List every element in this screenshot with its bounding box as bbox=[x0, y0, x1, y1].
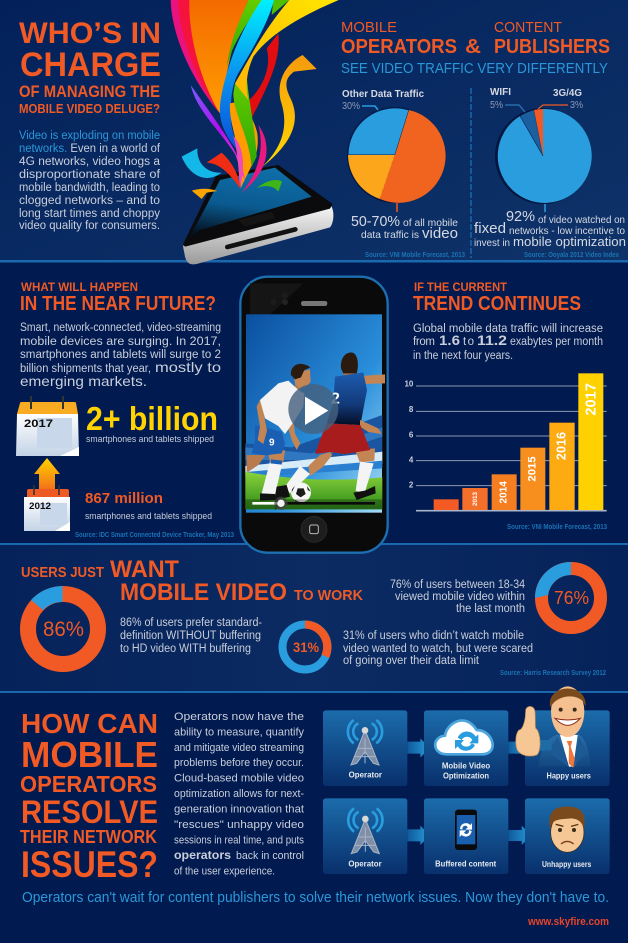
heading: near future bbox=[20, 280, 216, 315]
title: how can mobile operators resolve: ISSUES? bbox=[21, 844, 158, 885]
heading: users just want mobile video to work: MOBILE VIDEO bbox=[120, 579, 287, 606]
title: who's in charge: WHO’S IN bbox=[19, 17, 161, 50]
bar chart: mobile data traffic: 6 bbox=[409, 430, 414, 439]
heading: mobile operators and content publishers: OPERATORS bbox=[341, 36, 457, 58]
stat: 867 million: smartphones and tablets shipped bbox=[85, 511, 212, 522]
pie chart: publishers bbox=[474, 86, 626, 259]
heading: mobile operators and content publishers bbox=[341, 19, 610, 58]
paragraph: operators now: operators bbox=[174, 850, 231, 862]
paragraph: operators now: Cloud-based mobile video bbox=[174, 772, 304, 784]
pie chart: publishers: 92% bbox=[506, 208, 535, 225]
trend paragraph: Global mobile data traffic will increase bbox=[413, 323, 603, 335]
bar chart: mobile data traffic bbox=[404, 373, 607, 511]
icon: calendar 2017 bbox=[16, 396, 79, 456]
donut: 76%: 76% bbox=[554, 587, 589, 608]
box: operator: Operator bbox=[349, 771, 382, 780]
video scene bbox=[245, 353, 385, 511]
trend paragraph: 11.2 bbox=[477, 332, 507, 348]
bar chart: mobile data traffic: 2015 bbox=[527, 456, 539, 482]
heading: trend continues bbox=[413, 280, 581, 315]
near future paragraph bbox=[20, 322, 221, 389]
box: mobile video optimization bbox=[424, 710, 508, 786]
bar chart: mobile data traffic: 2017 bbox=[583, 383, 599, 416]
box: mobile video optimization: Optimization bbox=[443, 771, 489, 780]
paragraph: operators now: optimization allows for next- bbox=[174, 788, 304, 800]
paragraph: operators now: "rescues" unhappy video bbox=[174, 819, 304, 831]
heading: near future: WHAT WILL HAPPEN bbox=[21, 280, 138, 294]
arrow bbox=[407, 826, 430, 845]
box: operator: Operator bbox=[348, 859, 382, 868]
stat: 867 million: 867 million bbox=[85, 490, 163, 507]
title: how can mobile operators resolve: RESOLVE bbox=[21, 794, 158, 830]
donut: 86%: 86% bbox=[43, 618, 84, 641]
paragraph: operators now: of the user experience. bbox=[174, 866, 275, 878]
pie chart: operators: of all mobile bbox=[403, 217, 458, 229]
website url: www.skyfire.com bbox=[527, 916, 609, 928]
paragraph: operators now: and mitigate video streaming bbox=[174, 742, 304, 754]
donut: 31%: 31% bbox=[293, 640, 319, 655]
text: 31% of users: 31% of users who didn’t watch mobile bbox=[343, 630, 524, 642]
text: 86% of users: to HD video WITH buffering bbox=[120, 643, 251, 655]
paragraph: operators now: problems before they occur. bbox=[174, 757, 304, 769]
heading: mobile operators and content publishers: & bbox=[465, 36, 481, 58]
intro paragraph bbox=[19, 130, 161, 232]
text: 86% of users: definition WITHOUT buffering bbox=[120, 630, 261, 642]
box: buffered content bbox=[424, 798, 508, 874]
pie chart: publishers: fixed bbox=[474, 220, 506, 237]
panel: current trend bbox=[404, 280, 607, 531]
heading: users just want mobile video to work: TO WORK bbox=[294, 588, 364, 604]
paragraph: operators now: ability to measure, quantify bbox=[174, 726, 304, 738]
icon: calendar 2012: 2012 bbox=[29, 501, 51, 511]
flow: unhappy path bbox=[323, 798, 610, 874]
text: 76% of users: viewed mobile video within bbox=[395, 591, 525, 603]
panel: who's in charge intro bbox=[19, 17, 161, 232]
trend paragraph bbox=[413, 323, 603, 362]
near future paragraph: Smart, network-connected, video-streaming bbox=[20, 322, 221, 334]
player numbers: 2 bbox=[331, 390, 340, 407]
heading: mobile operators and content publishers: CONTENT bbox=[494, 19, 562, 36]
player: blue shirt bbox=[275, 353, 385, 511]
text: 76% of users: 76% of users between 18-34 bbox=[390, 579, 526, 591]
pie chart: publishers: 5% bbox=[490, 100, 503, 111]
near future paragraph: emerging markets. bbox=[20, 373, 147, 389]
trend paragraph: 1.6 bbox=[439, 332, 460, 348]
pie chart: publishers: 3% bbox=[570, 100, 583, 111]
heading: trend continues: TREND CONTINUES bbox=[413, 293, 581, 315]
player numbers: 9 bbox=[269, 437, 275, 448]
pie chart: publishers: networks - low incentive to bbox=[509, 226, 625, 237]
panel: how can operators resolve bbox=[20, 708, 304, 885]
intro paragraph: networks. Even in a world of bbox=[19, 143, 161, 155]
pie chart: operators: 50-70% bbox=[351, 213, 400, 230]
bar chart: mobile data traffic: 8 bbox=[409, 405, 414, 414]
pie chart: publishers: mobile optimization bbox=[513, 234, 626, 249]
title: how can mobile operators resolve: THEIR NETWORK bbox=[20, 827, 157, 847]
pie chart: publishers: 3G/4G bbox=[553, 87, 582, 99]
player: white shirt bbox=[247, 364, 311, 501]
panel: near future bbox=[16, 280, 234, 539]
intro paragraph: mobile bandwidth, leading to bbox=[19, 182, 160, 194]
title: who's in charge: MOBILE VIDEO DELUGE? bbox=[19, 101, 160, 116]
text: 86% of users: 86% of users prefer standard- bbox=[120, 617, 262, 629]
player numbers bbox=[269, 390, 340, 448]
pie chart: operators: Other Data Traffic bbox=[342, 88, 424, 100]
divider: dashed column rule bbox=[470, 88, 472, 258]
bar chart: mobile data traffic: 2014 bbox=[499, 481, 510, 503]
box: unhappy users bbox=[525, 798, 610, 874]
pie chart: operators: 30% bbox=[342, 101, 360, 112]
near future paragraph: smartphones and tablets will surge to 2 bbox=[20, 349, 221, 361]
flow: happy path bbox=[323, 686, 610, 786]
arrow: growth from 2012 to 2017 bbox=[34, 458, 60, 492]
pie chart: operators: Source: VNI Mobile Forecast, 2013 bbox=[365, 250, 465, 259]
panel: phone with football video bbox=[240, 277, 388, 553]
icon: calendar 2017: 2017 bbox=[24, 418, 53, 430]
paragraph: operators now: generation innovation that bbox=[174, 804, 304, 816]
box: happy users: Happy users bbox=[546, 771, 591, 780]
heading: trend continues: IF THE CURRENT bbox=[414, 280, 508, 294]
trend paragraph: from bbox=[413, 336, 435, 348]
title: who's in charge: CHARGE bbox=[20, 46, 161, 84]
donut: 31% bbox=[282, 620, 331, 670]
source: Source: IDC Smart Connected Device Tracker, May 2013 bbox=[75, 530, 234, 539]
stat: 2+ billion: 2+ billion bbox=[86, 400, 218, 437]
intro paragraph: Video is exploding on mobile bbox=[19, 130, 160, 142]
pie chart: operators: video bbox=[422, 225, 458, 242]
paragraph: operators now: sessions in real time, and puts bbox=[174, 834, 304, 846]
bar chart: mobile data traffic: 2013 bbox=[472, 491, 479, 506]
title: who's in charge: OF MANAGING THE bbox=[19, 82, 160, 101]
play button bbox=[288, 384, 338, 434]
stat: 867 million bbox=[85, 490, 212, 522]
arrow bbox=[407, 738, 430, 758]
text: 31% of users: of going over their data limit bbox=[343, 655, 480, 667]
panel: operators and publishers bbox=[341, 19, 626, 259]
paragraph: operators now bbox=[174, 711, 304, 878]
heading: mobile operators and content publishers: MOBILE bbox=[341, 19, 397, 36]
heading: near future: IN THE NEAR FUTURE? bbox=[20, 293, 216, 315]
intro paragraph: video quality for consumers. bbox=[19, 220, 160, 232]
panel: network flow diagrams bbox=[323, 686, 610, 874]
heading: users just want mobile video to work bbox=[21, 556, 364, 606]
illustration: phone with colour ribbons bbox=[171, 0, 339, 264]
text: 31% of users: video wanted to watch, but were scared bbox=[343, 643, 533, 655]
pie chart: operators bbox=[342, 88, 465, 259]
text: 76% of users: the last month bbox=[456, 603, 525, 615]
pie chart: publishers: WIFI bbox=[490, 86, 511, 98]
donut: 86% bbox=[28, 586, 98, 664]
arrow bbox=[508, 826, 532, 845]
bar chart: mobile data traffic: 4 bbox=[409, 455, 414, 464]
panel: users want mobile video bbox=[21, 556, 606, 677]
icon: calendar 2012 bbox=[24, 485, 70, 531]
pie chart: operators: data traffic is bbox=[361, 229, 419, 241]
phone body bbox=[240, 277, 388, 553]
trend paragraph: in the next four years. bbox=[413, 350, 513, 362]
box: happy users bbox=[508, 686, 610, 786]
title: how can mobile operators resolve: OPERATORS bbox=[20, 771, 157, 797]
pie chart: publishers: invest in bbox=[474, 238, 510, 249]
football bbox=[291, 482, 311, 502]
near future paragraph: mobile devices are surging. In 2017, bbox=[20, 336, 221, 348]
heading: users just want mobile video to work: USERS JUST bbox=[21, 564, 104, 581]
box: operator bbox=[323, 798, 407, 874]
intro paragraph: long start times and choppy bbox=[19, 208, 160, 220]
intro paragraph: disproportionate share of bbox=[19, 169, 161, 181]
text: 31% of users bbox=[343, 630, 533, 667]
title: how can mobile operators resolve: HOW CAN bbox=[21, 708, 158, 739]
stat: 2+ billion: smartphones and tablets shipped bbox=[86, 434, 214, 445]
bar chart: mobile data traffic: 10 bbox=[404, 380, 414, 389]
text: 76% of users bbox=[390, 579, 526, 615]
bar chart: mobile data traffic: 2 bbox=[409, 481, 414, 490]
text: 86% of users bbox=[120, 617, 262, 655]
box: unhappy users: Unhappy users bbox=[542, 860, 592, 869]
paragraph: operators now: back in control bbox=[236, 850, 304, 862]
trend paragraph: to bbox=[463, 336, 474, 348]
intro paragraph: clogged networks – and to bbox=[19, 195, 160, 207]
source: Source: VNI Mobile Forecast, 2013 bbox=[507, 522, 607, 531]
title: who's in charge bbox=[19, 17, 161, 116]
bar chart: mobile data traffic: 2016 bbox=[554, 432, 568, 460]
near future paragraph: billion shipments that year, bbox=[20, 363, 151, 375]
intro paragraph: 4G networks, video hogs a bbox=[19, 156, 161, 168]
box: operator bbox=[323, 710, 407, 786]
near future paragraph: mostly to bbox=[155, 359, 221, 375]
paragraph: operators now: Operators now have the bbox=[174, 711, 304, 723]
box: mobile video optimization: Mobile Video bbox=[442, 761, 490, 770]
title: how can mobile operators resolve: MOBILE bbox=[21, 734, 158, 775]
trend paragraph: exabytes per month bbox=[510, 336, 603, 348]
heading: users just want mobile video to work: WANT bbox=[110, 556, 179, 583]
video progress bar bbox=[245, 497, 382, 510]
heading: mobile operators and content publishers: PUBLISHERS bbox=[494, 36, 610, 58]
title: how can mobile operators resolve bbox=[20, 708, 158, 885]
donut: 76% bbox=[535, 562, 600, 628]
stadium bbox=[245, 415, 382, 509]
box: buffered content: Buffered content bbox=[435, 860, 496, 869]
